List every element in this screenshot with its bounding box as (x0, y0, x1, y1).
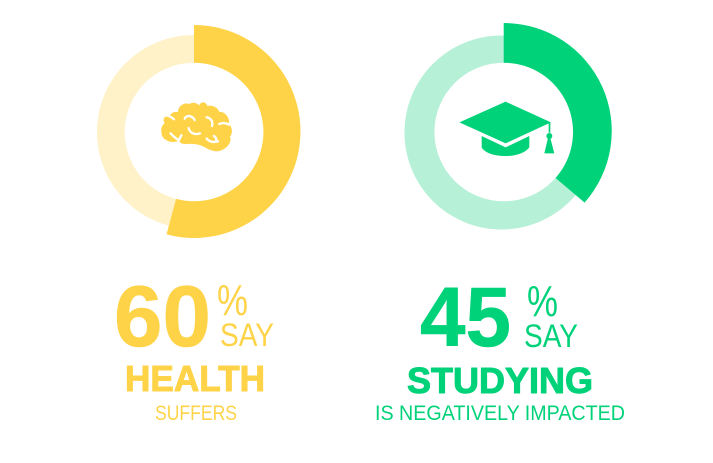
icon: graduation cap (459, 102, 554, 156)
big number: 45: 45 (420, 270, 511, 364)
heading: studying: STUDYING (407, 360, 593, 401)
big number: 60: 60 (114, 269, 211, 365)
donut background ring: health (97, 35, 291, 229)
donut value segment: health (166, 25, 300, 238)
label: suffers: SUFFERS (155, 402, 237, 425)
heading: health: HEALTH (125, 358, 265, 399)
panel: studying donut chart (375, 23, 625, 425)
donut value segment: studying (504, 23, 612, 203)
label: is negatively impacted: IS NEGATIVELY IMPACTED (375, 402, 625, 425)
donut background ring: studying (404, 35, 599, 230)
percent sign: % (217, 276, 248, 325)
icon: brain (161, 102, 232, 151)
panel: health donut chart (97, 25, 300, 425)
label: say: SAY (524, 318, 578, 354)
label: say: SAY (220, 317, 274, 353)
percent sign: % (527, 277, 558, 326)
